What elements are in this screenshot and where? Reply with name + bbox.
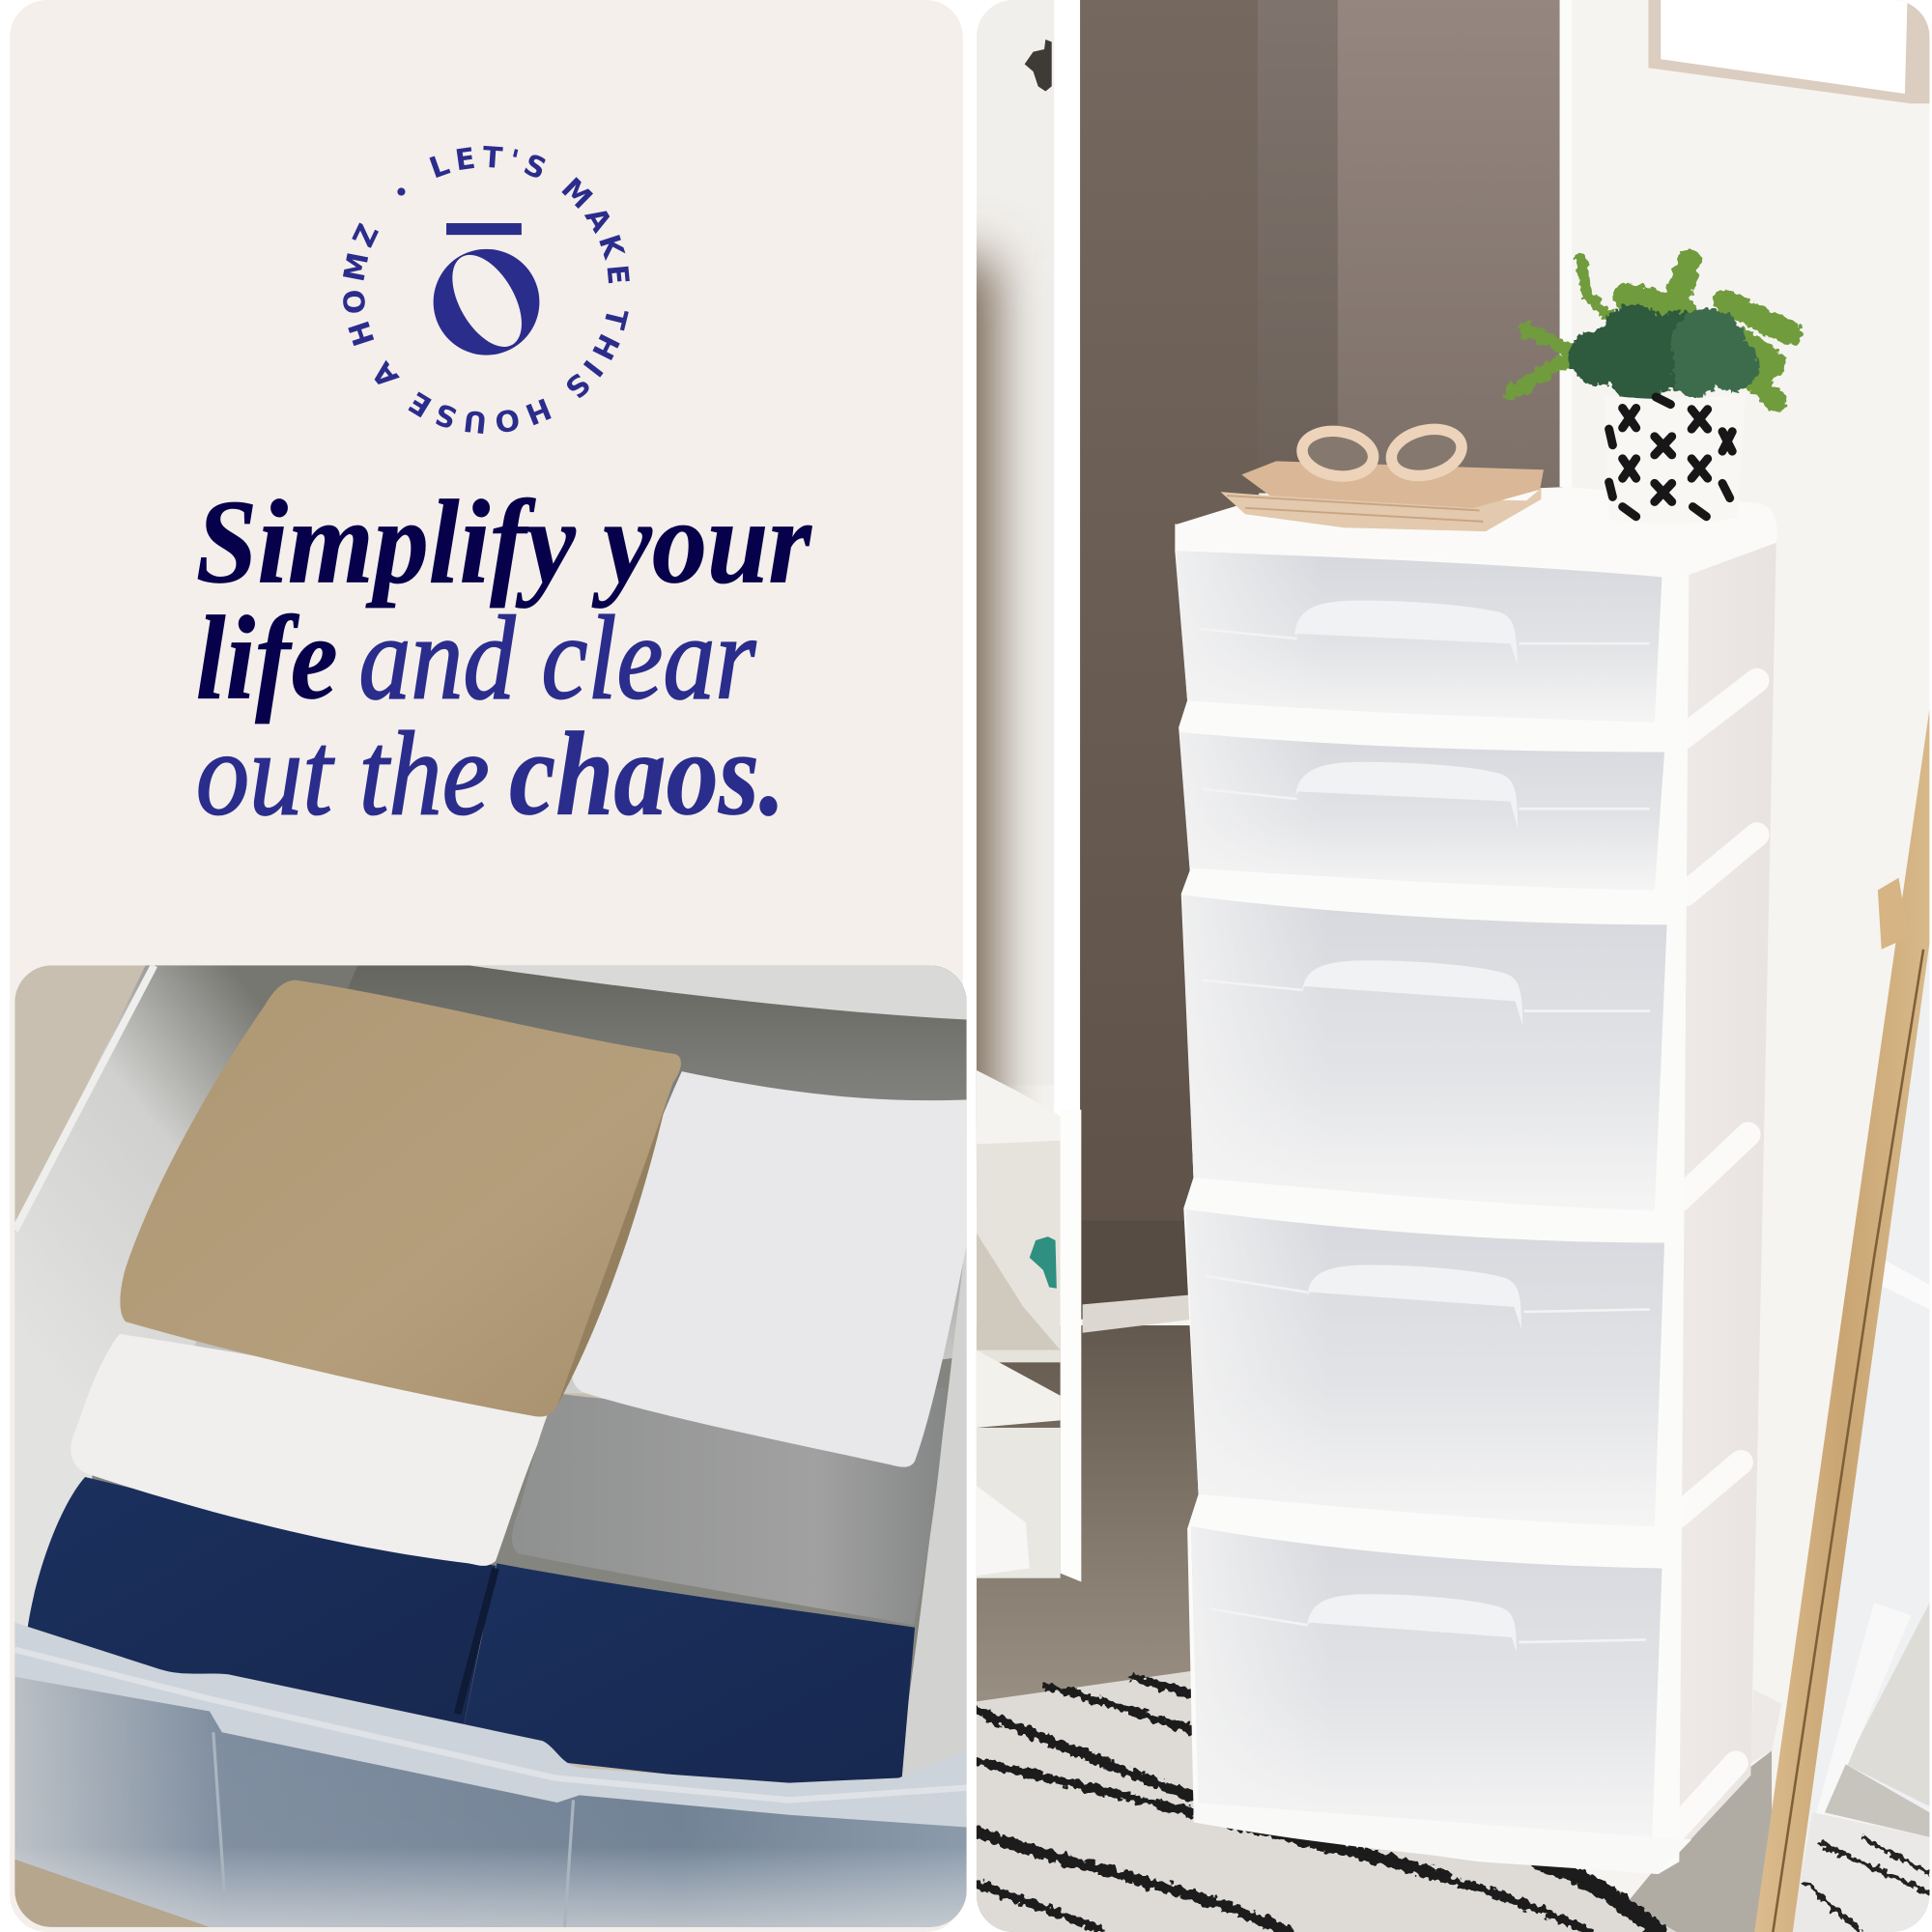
drawer 4 bbox=[1186, 1209, 1664, 1526]
shelf bay lower bbox=[977, 1428, 1061, 1578]
white wall pilaster bbox=[1560, 0, 1572, 487]
dresser side ribs bbox=[1674, 681, 1757, 1831]
cabinet side post bbox=[1061, 1110, 1081, 1582]
mirror frame groove bbox=[1773, 950, 1923, 1932]
logo: circular tagline: LET'S MAKE THIS HOUSE A HOMZ bbox=[343, 145, 630, 434]
drawer 2 left fade bbox=[1179, 732, 1664, 891]
garment: tan bbox=[120, 980, 681, 1417]
room wall behind drawer bbox=[14, 965, 967, 1927]
eyeglasses bbox=[1299, 422, 1466, 483]
wall baseboard right bbox=[1750, 1690, 1781, 1763]
picture frame bbox=[1648, 0, 1929, 103]
drawer 2 handle bbox=[1295, 762, 1518, 829]
rug stripes bbox=[977, 1678, 1659, 1932]
dresser side bbox=[1659, 524, 1776, 1874]
photo: folded clothes in drawer bbox=[14, 965, 967, 1927]
rug base bbox=[977, 1670, 1677, 1932]
shelf bay upper bbox=[977, 1116, 1061, 1362]
drawer 5 face bbox=[1191, 1526, 1662, 1837]
drawer back wall bbox=[74, 965, 967, 1393]
white cabinet door bbox=[977, 0, 1056, 1085]
mirror reflection wall bbox=[1846, 1603, 1929, 1806]
baseboard bbox=[1083, 1294, 1193, 1333]
drawer 1 left fade bbox=[1177, 552, 1662, 723]
drawer 1 handle bbox=[1294, 601, 1518, 666]
floor bbox=[977, 1325, 1272, 1932]
pot body bbox=[1604, 392, 1746, 524]
tan fold side bbox=[557, 1103, 666, 1406]
brown wall dark section bbox=[1080, 0, 1259, 1233]
drawer left wall bbox=[14, 965, 357, 1628]
drawer 3 face bbox=[1182, 895, 1667, 1210]
books upper bbox=[1241, 461, 1544, 508]
drawer left wall edge bbox=[14, 965, 155, 1231]
mirror reflection panel bbox=[1806, 1603, 1911, 1849]
shelf board middle bbox=[977, 1350, 1061, 1428]
drawer 5 bbox=[1191, 1526, 1662, 1837]
stacked books bbox=[1221, 461, 1544, 531]
picture frame inner mat bbox=[1661, 0, 1907, 94]
pot with plant bbox=[1512, 259, 1790, 524]
rug corner right of mirror bbox=[1790, 1812, 1929, 1932]
drawer 3 left fade bbox=[1182, 895, 1667, 1210]
garment: navy crease bbox=[458, 1568, 496, 1714]
headline line 2 regular: and clear bbox=[358, 591, 756, 724]
drawer 2 bbox=[1179, 732, 1664, 891]
mirror reflection drawer rim bbox=[1874, 1258, 1929, 1309]
brown wall light section bbox=[1338, 0, 1562, 494]
white box on lower shelf bbox=[977, 1486, 1030, 1576]
drawer 4 handle bbox=[1307, 1265, 1521, 1329]
garment: white left bbox=[71, 1334, 553, 1566]
base plate bbox=[1193, 1803, 1691, 1874]
knob lower bbox=[1030, 1236, 1057, 1289]
dresser top lid bbox=[1175, 487, 1777, 580]
shelf board upper bbox=[977, 1070, 1061, 1144]
drawer 3 handle bbox=[1302, 960, 1522, 1026]
mirror bracket bbox=[1878, 878, 1909, 950]
book page lines bbox=[1227, 496, 1483, 522]
mirror wooden frame bbox=[1754, 709, 1929, 1932]
panel: left cream background bbox=[10, 0, 963, 1932]
floor right of dresser bbox=[1603, 1750, 1772, 1932]
logo: macron bar bbox=[446, 223, 522, 235]
logo: separator dot bbox=[397, 187, 406, 196]
logo badge bbox=[343, 145, 630, 434]
white wall bbox=[977, 0, 1929, 1932]
logo: letter o mark bbox=[434, 249, 539, 355]
drawer 5 handle bbox=[1307, 1594, 1517, 1652]
brown wall middle section bbox=[1258, 0, 1339, 494]
books lower bbox=[1221, 488, 1541, 531]
glasses right lens bbox=[1386, 422, 1466, 483]
drawer 4 face bbox=[1186, 1209, 1664, 1526]
mirror reflection floor bbox=[1825, 1764, 1929, 1837]
drawer right wall bbox=[897, 1233, 967, 1781]
glasses left lens bbox=[1299, 427, 1377, 481]
drawer 2 crease bbox=[1202, 789, 1650, 809]
plant foliage blurred right bbox=[1670, 308, 1759, 398]
cabinet door shadow bbox=[912, 259, 994, 1147]
rug bbox=[977, 1670, 1677, 1932]
cabinet shelving unit bbox=[977, 1070, 1081, 1582]
headline line 3 bold: chaos. bbox=[509, 707, 785, 839]
headline line 3 regular: out the bbox=[196, 707, 490, 839]
drawer 5 crease bbox=[1210, 1609, 1646, 1642]
headline bbox=[196, 475, 812, 839]
frosted drawer front panel bbox=[14, 1659, 967, 1927]
headline line 2 bold: life bbox=[196, 591, 338, 724]
drawer 1 crease bbox=[1199, 629, 1650, 643]
drawer 4 crease bbox=[1206, 1276, 1650, 1312]
drawer 5 left fade bbox=[1191, 1526, 1662, 1837]
drawer 1 face bbox=[1177, 552, 1662, 723]
photo: plastic drawer tower in a room bbox=[912, 0, 1929, 1932]
garment: grey bbox=[512, 1387, 947, 1625]
drawer 4 left fade bbox=[1186, 1209, 1664, 1526]
floor under drawer bbox=[14, 1860, 210, 1927]
lower dark wall bbox=[1080, 1221, 1204, 1320]
plant light sprigs bbox=[1512, 259, 1790, 401]
garment: navy left bbox=[27, 1477, 496, 1724]
garment: white right bbox=[572, 1071, 967, 1467]
frosted panel bottom fade bbox=[14, 1659, 967, 1927]
shelf bay shadow bbox=[977, 1233, 1061, 1350]
garment: navy right bbox=[459, 1563, 915, 1800]
drawer front rim bbox=[14, 1623, 967, 1828]
drawer rim highlight bbox=[14, 1650, 967, 1800]
drawer front corner seams bbox=[213, 1732, 573, 1927]
cabinet door edge bbox=[1054, 0, 1080, 1141]
headline line 1: Simplify your bbox=[196, 475, 812, 608]
drawer 2 face bbox=[1179, 732, 1664, 891]
rug corner stripes bbox=[1803, 1837, 1929, 1932]
knob upper bbox=[1025, 40, 1052, 91]
drawer 3 crease bbox=[1202, 980, 1650, 1011]
drawer 3 bbox=[1182, 895, 1667, 1210]
dresser front silhouette bbox=[1175, 524, 1690, 1874]
plant foliage dark bbox=[1570, 304, 1719, 402]
mirror reflection bbox=[1800, 937, 1929, 1849]
drawer 1 bbox=[1177, 552, 1662, 723]
pot pattern bbox=[1609, 397, 1732, 517]
drawer interior floor bbox=[74, 1356, 967, 1781]
white shelf above drawer bbox=[469, 965, 967, 1020]
